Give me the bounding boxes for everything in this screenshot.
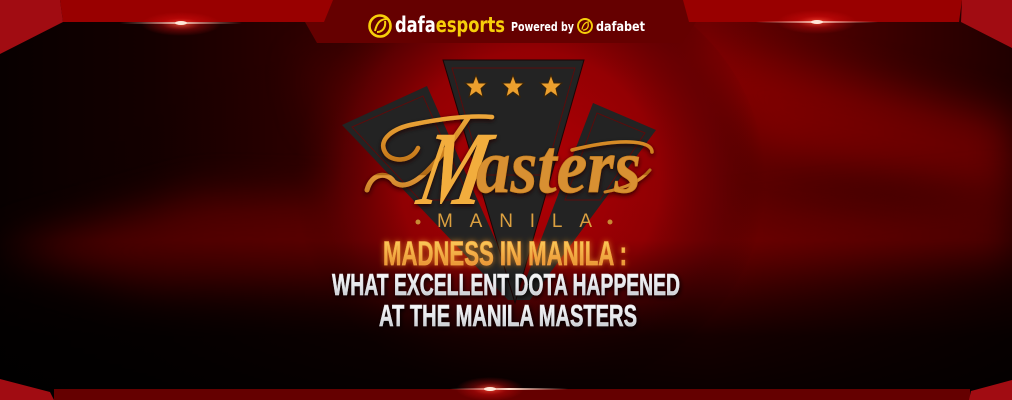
flare: top right <box>756 10 878 34</box>
subtitle dots <box>416 220 612 224</box>
stars <box>465 75 562 97</box>
Masters script wordmark <box>367 111 652 228</box>
icon: dafa ring large <box>370 16 390 36</box>
MANILA subtitle: MANILA <box>437 211 592 232</box>
pennant: center <box>443 60 584 303</box>
bottom left corner <box>0 379 54 400</box>
top left corner <box>0 0 63 54</box>
headline line 3: AT THE MANILA MASTERS <box>379 299 637 333</box>
pennant: left <box>342 86 522 300</box>
flare: top left <box>120 12 242 36</box>
dafabet wordmark: dafabet <box>596 19 645 35</box>
top right corner <box>961 0 1012 48</box>
headline line 2: WHAT EXCELLENT DOTA HAPPENED <box>332 268 680 302</box>
M letter: M <box>408 111 502 228</box>
icon: dafa ring small <box>578 19 592 33</box>
flourishes <box>367 116 652 192</box>
Masters Manila logo <box>342 60 656 303</box>
top center header plate <box>305 0 702 43</box>
top right bar <box>683 0 962 22</box>
dafaesports wordmark: dafaesports <box>395 13 505 37</box>
powered by: Powered by <box>511 20 574 34</box>
bottom right corner <box>969 380 1012 400</box>
asters letters: asters <box>476 124 641 210</box>
headline line 1: MADNESS IN MANILA : <box>383 235 627 273</box>
pennant: right <box>518 103 656 300</box>
bottom band <box>54 389 970 400</box>
headline <box>332 235 680 333</box>
flare: bottom <box>450 377 568 400</box>
sponsor logo row <box>370 13 645 37</box>
top left bar <box>60 0 333 22</box>
